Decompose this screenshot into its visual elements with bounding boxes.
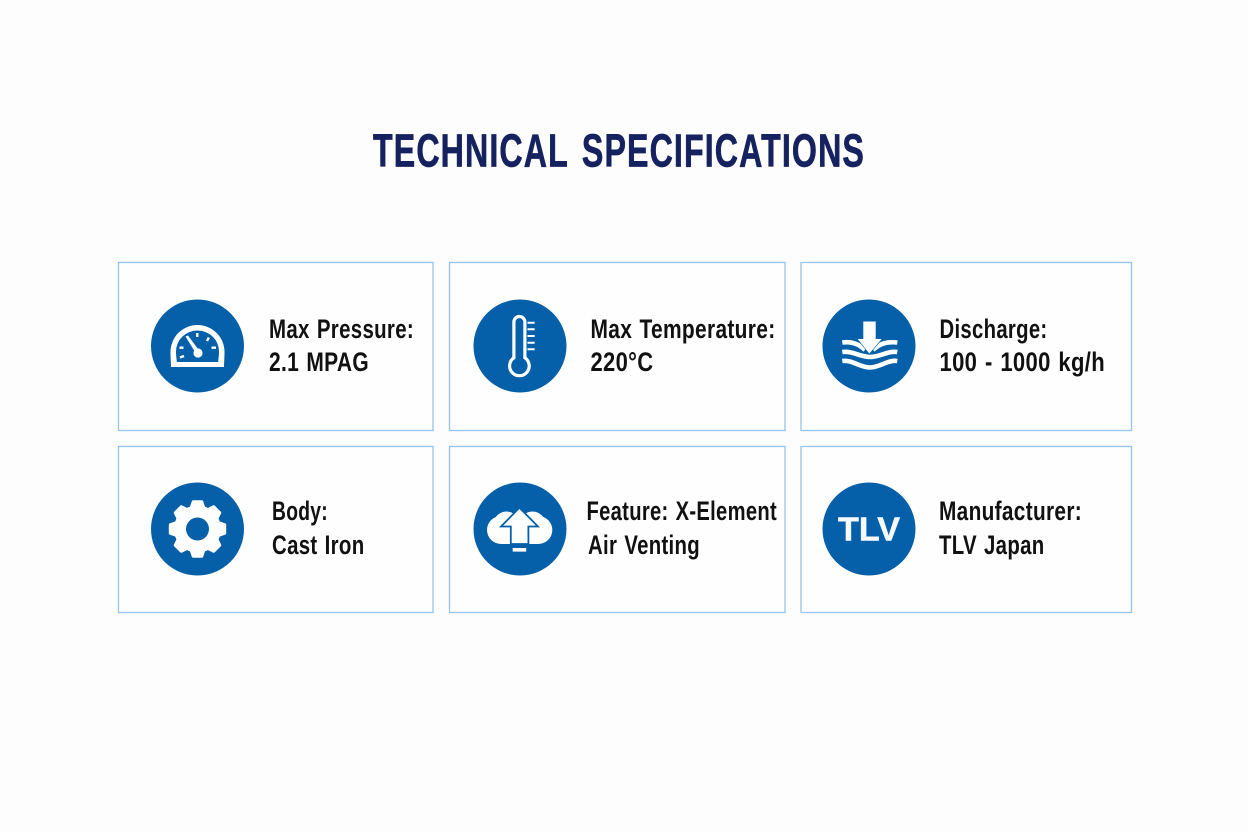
text: feature: Feature: X-Element — [586, 496, 777, 526]
panel: discharge — [801, 262, 1132, 430]
text: discharge — [940, 314, 1105, 377]
text: discharge: 100 - 1000 kg/h — [940, 347, 1105, 377]
icon: discharge arrow and waves — [822, 300, 916, 392]
panel: max temperature — [450, 262, 785, 430]
icon: thermometer — [474, 300, 566, 392]
text: manufacturer: TLV Japan — [939, 530, 1044, 560]
text: body — [272, 496, 364, 560]
icon: gear — [151, 482, 244, 576]
icon: TLV logo — [822, 482, 916, 576]
text: max temperature: Max Temperature: — [590, 314, 776, 344]
text: max temperature — [590, 314, 776, 377]
text: max pressure: 2.1 MPAG — [269, 347, 369, 377]
text: body: Cast Iron — [272, 530, 364, 560]
text: max pressure: Max Pressure: — [269, 314, 414, 344]
panel: max pressure — [118, 262, 433, 430]
text: feature: Air Venting — [588, 530, 700, 560]
icon: cloud upload — [474, 482, 566, 576]
text: max temperature: 220°C — [590, 347, 654, 377]
icon: TLV logo: TLV — [838, 510, 900, 548]
text: discharge: Discharge: — [940, 314, 1048, 344]
text: feature — [586, 496, 777, 560]
title: TECHNICAL SPECIFICATIONS — [373, 124, 865, 176]
text: max pressure — [269, 314, 414, 377]
panel: feature — [450, 446, 785, 612]
panel: manufacturer — [801, 446, 1132, 612]
text: manufacturer: Manufacturer: — [939, 496, 1082, 526]
text: body: Body: — [272, 496, 328, 526]
icon: pressure gauge — [151, 300, 244, 392]
text: manufacturer — [939, 496, 1082, 560]
panel: body — [118, 446, 433, 612]
